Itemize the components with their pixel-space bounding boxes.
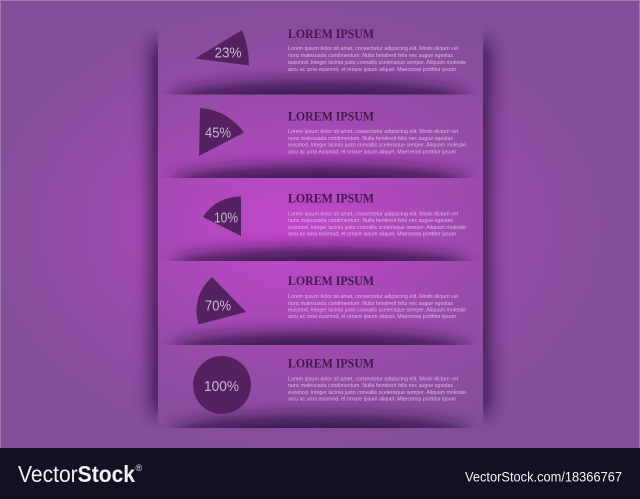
text block 4: Lorem ipsum dolor sit amet, consectetur adipiscing elit. Morbi dictum vel bbox=[288, 294, 458, 300]
text block 3: nunc malesuada condimentum. Nulla hendrerit felis nec augue egestas bbox=[288, 218, 453, 224]
heading 5: LOREM IPSUM bbox=[288, 356, 374, 370]
footer logo: VectorStock bbox=[18, 461, 136, 487]
text block 5 bbox=[288, 376, 466, 403]
text block 4: euismod. Integer lacinia justo convallis scelerisque semper. Aliquam molestie bbox=[288, 308, 466, 314]
45% label: 45% bbox=[205, 124, 231, 142]
text block 1 bbox=[288, 46, 466, 73]
footer image id: VectorStock.com/18366767 bbox=[465, 470, 622, 484]
text block 3: arcu ac urna euismod, et ornare ipsum aliquet. Maecenas porttitor ipsum bbox=[288, 232, 456, 238]
text block 4: arcu ac urna euismod, et ornare ipsum aliquet. Maecenas porttitor ipsum bbox=[288, 314, 456, 320]
heading 3: LOREM IPSUM bbox=[288, 192, 374, 206]
top fade bbox=[130, 0, 510, 22]
text block 3: euismod. Integer lacinia justo convallis scelerisque semper. Aliquam molestie bbox=[288, 225, 466, 231]
text block 5: euismod. Integer lacinia justo convallis scelerisque semper. Aliquam molestie bbox=[288, 390, 466, 396]
text block 4: nunc malesuada condimentum. Nulla hendrerit felis nec augue egestas bbox=[288, 301, 453, 307]
panel: band 2 bbox=[166, 108, 473, 178]
panel: band 1 bbox=[167, 30, 473, 94]
icon: 23% pie slice bbox=[195, 30, 249, 66]
icon: 100% circle bbox=[193, 356, 251, 414]
icon: 10% pie slice bbox=[203, 196, 241, 236]
text block 2: euismod. Integer lacinia justo convallis scelerisque semper. Aliquam molestie bbox=[288, 143, 466, 149]
text block 1: Lorem ipsum dolor sit amet, consectetur adipiscing elit. Morbi dictum vel bbox=[288, 46, 458, 52]
panel stack background bbox=[158, 0, 483, 428]
panel: band 4 bbox=[167, 276, 473, 345]
panel side shadow bbox=[150, 42, 491, 414]
70% label: 70% bbox=[205, 298, 231, 314]
footer bar bbox=[0, 448, 640, 499]
text block 3 bbox=[288, 211, 466, 238]
registered mark: ® bbox=[136, 463, 142, 473]
heading 4: LOREM IPSUM bbox=[288, 274, 374, 288]
icon: 70% pie slice bbox=[197, 277, 246, 324]
heading 2: LOREM IPSUM bbox=[288, 110, 374, 124]
text block 1: arcu ac urna euismod, et ornare ipsum aliquet. Maecenas porttitor ipsum bbox=[288, 67, 456, 73]
text block 3: Lorem ipsum dolor sit amet, consectetur adipiscing elit. Morbi dictum vel bbox=[288, 211, 458, 217]
text block 2: Lorem ipsum dolor sit amet, consectetur adipiscing elit. Morbi dictum vel bbox=[288, 129, 458, 135]
text block 5: Lorem ipsum dolor sit amet, consectetur adipiscing elit. Morbi dictum vel bbox=[288, 376, 458, 382]
23% label: 23% bbox=[214, 44, 242, 62]
text block 2: nunc malesuada condimentum. Nulla hendrerit felis nec augue egestas bbox=[288, 136, 453, 142]
10% label: 10% bbox=[214, 210, 238, 226]
panel: band 3 bbox=[166, 194, 473, 261]
text block 1: nunc malesuada condimentum. Nulla hendrerit felis nec augue egestas bbox=[288, 53, 453, 59]
icon: 45% pie slice bbox=[199, 108, 244, 156]
panel: band 5 bbox=[168, 356, 472, 428]
text block 2: arcu ac urna euismod, et ornare ipsum aliquet. Maecenas porttitor ipsum bbox=[288, 149, 456, 155]
text block 2 bbox=[288, 129, 466, 155]
text block 4 bbox=[288, 294, 466, 320]
100% label: 100% bbox=[204, 378, 239, 395]
heading 1: LOREM IPSUM bbox=[288, 27, 374, 41]
text block 5: nunc malesuada condimentum. Nulla hendrerit felis nec augue egestas bbox=[288, 383, 453, 389]
text block 1: euismod. Integer lacinia justo convallis scelerisque semper. Aliquam molestie bbox=[288, 60, 466, 66]
text block 5: arcu ac urna euismod, et ornare ipsum aliquet. Maecenas porttitor ipsum bbox=[288, 397, 456, 403]
